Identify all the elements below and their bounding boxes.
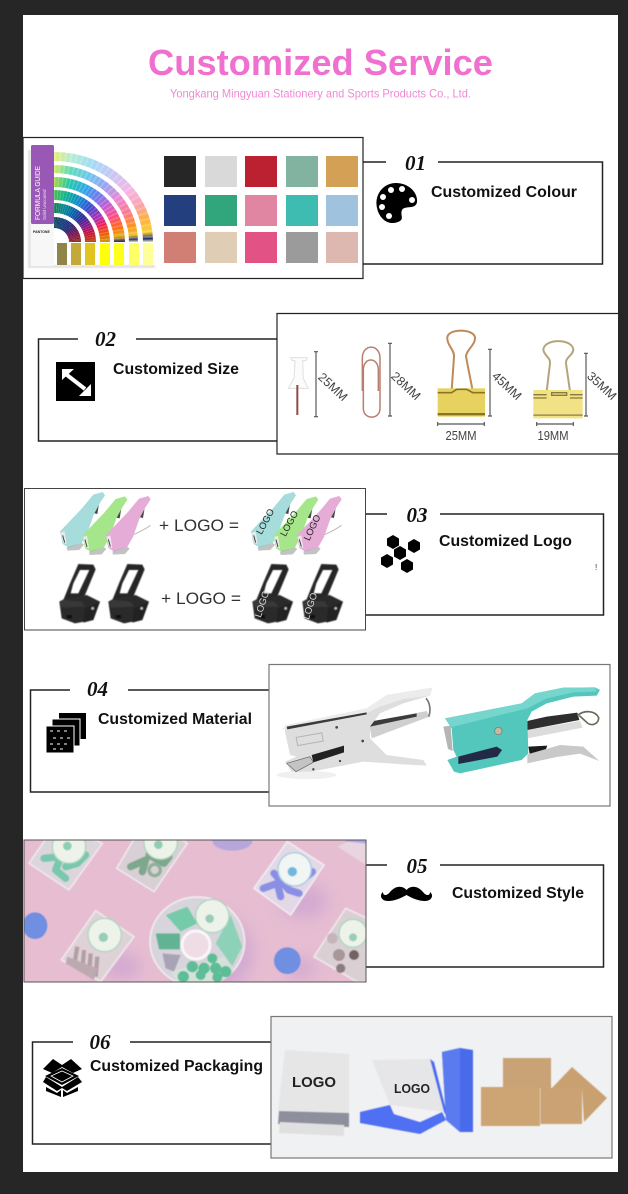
staplers after: LOGO bbox=[254, 507, 277, 537]
icon: hexagons bbox=[381, 535, 420, 573]
box violet pins bbox=[254, 842, 324, 915]
white box bbox=[278, 1050, 349, 1136]
number 01: 01 bbox=[405, 151, 426, 175]
cover sublabel: Solid Uncoated bbox=[42, 189, 47, 220]
image: stationery photo bbox=[24, 840, 366, 982]
panel 05: customized style bbox=[24, 840, 604, 982]
icon: material sheets bbox=[46, 713, 86, 753]
box teal pins bbox=[28, 840, 104, 891]
kraft boxes bbox=[481, 1058, 607, 1126]
blue magnets bbox=[23, 831, 369, 974]
panel 03: customized logo bbox=[24, 488, 604, 630]
teal stapler bbox=[443, 687, 600, 773]
pantone fan bbox=[23, 138, 163, 278]
number 02: 02 bbox=[95, 327, 116, 351]
bottom colour chips bbox=[57, 243, 153, 265]
staplers after: LOGO bbox=[302, 513, 324, 543]
fan backing bbox=[28, 150, 155, 268]
cover label: FORMULA GUIDE bbox=[35, 166, 42, 220]
number 06: 06 bbox=[90, 1030, 111, 1054]
title: Customized Service bbox=[148, 42, 493, 83]
punchers before bbox=[59, 564, 149, 623]
label 35MM: 35MM bbox=[584, 369, 619, 403]
box green clips bbox=[116, 840, 188, 893]
push pin bbox=[288, 358, 308, 415]
soft shadows bbox=[108, 886, 327, 982]
label 19MM: 19MM bbox=[538, 429, 568, 443]
gold clip large bbox=[438, 331, 485, 417]
heading: customized size: Customized Size bbox=[113, 361, 239, 378]
donut organiser bbox=[150, 897, 245, 987]
small mark: ! bbox=[595, 563, 597, 572]
image: packaging bbox=[271, 1016, 612, 1158]
label 28MM: 28MM bbox=[388, 369, 423, 403]
plus logo 1: + LOGO = bbox=[159, 516, 239, 535]
pantone logo: PANTONE bbox=[33, 230, 50, 234]
panel 01: customized colour bbox=[23, 138, 602, 278]
staplers before bbox=[60, 492, 151, 555]
gold clip small bbox=[533, 341, 583, 418]
image: size samples bbox=[277, 314, 619, 454]
logo on blue box: LOGO bbox=[394, 1081, 430, 1096]
paper clip bbox=[362, 347, 380, 417]
heading: customized material: Customized Material bbox=[98, 711, 252, 728]
panel 06: customized packaging bbox=[32, 1016, 612, 1158]
plus logo 2: + LOGO = bbox=[161, 589, 241, 608]
image: colour chart bbox=[23, 138, 363, 278]
image: staplers bbox=[269, 664, 610, 806]
number 05: 05 bbox=[406, 854, 428, 878]
frame 01 bbox=[363, 162, 602, 264]
label 45MM: 45MM bbox=[489, 369, 524, 403]
box grey clips bbox=[61, 911, 134, 982]
number 03: 03 bbox=[406, 503, 428, 527]
frame 06 bbox=[32, 1042, 271, 1144]
icon: resize arrows bbox=[56, 362, 95, 401]
icon: mustache bbox=[381, 887, 432, 901]
dimension lines bbox=[314, 343, 588, 426]
heading: customized logo: Customized Logo bbox=[439, 533, 572, 550]
label 25MM vertical: 25MM bbox=[315, 370, 350, 404]
staplers after: LOGO bbox=[278, 509, 301, 539]
icon: palette bbox=[376, 183, 417, 223]
logo on white box: LOGO bbox=[292, 1074, 336, 1091]
frame 03 bbox=[365, 514, 604, 615]
blue mailer box bbox=[360, 1048, 473, 1134]
image: logo samples bbox=[24, 488, 366, 630]
subtitle: Yongkang Mingyuan Stationery and Sports Products Co., Ltd. bbox=[170, 86, 471, 100]
frame 04 bbox=[30, 690, 269, 792]
icon: open box bbox=[43, 1059, 82, 1097]
heading: customized style: Customized Style bbox=[452, 885, 584, 902]
box brown tacks bbox=[314, 908, 367, 982]
frame 02 bbox=[38, 339, 277, 441]
punchers after: LOGO bbox=[253, 589, 272, 619]
punchers after: LOGO bbox=[301, 591, 320, 621]
number 04: 04 bbox=[87, 677, 108, 701]
silver stapler bbox=[277, 688, 432, 779]
guide cover bbox=[31, 145, 54, 224]
staplers after bbox=[251, 492, 342, 555]
label 25MM horizontal: 25MM bbox=[446, 429, 476, 443]
colour swatches bbox=[164, 156, 358, 263]
panel 04: customized material bbox=[30, 664, 610, 806]
panel 02: customized size bbox=[38, 314, 619, 454]
frame 05 bbox=[365, 865, 604, 967]
punchers after bbox=[252, 564, 343, 623]
heading: customized colour: Customized Colour bbox=[431, 184, 577, 201]
heading: customized packaging: Customized Packaging bbox=[90, 1058, 263, 1075]
